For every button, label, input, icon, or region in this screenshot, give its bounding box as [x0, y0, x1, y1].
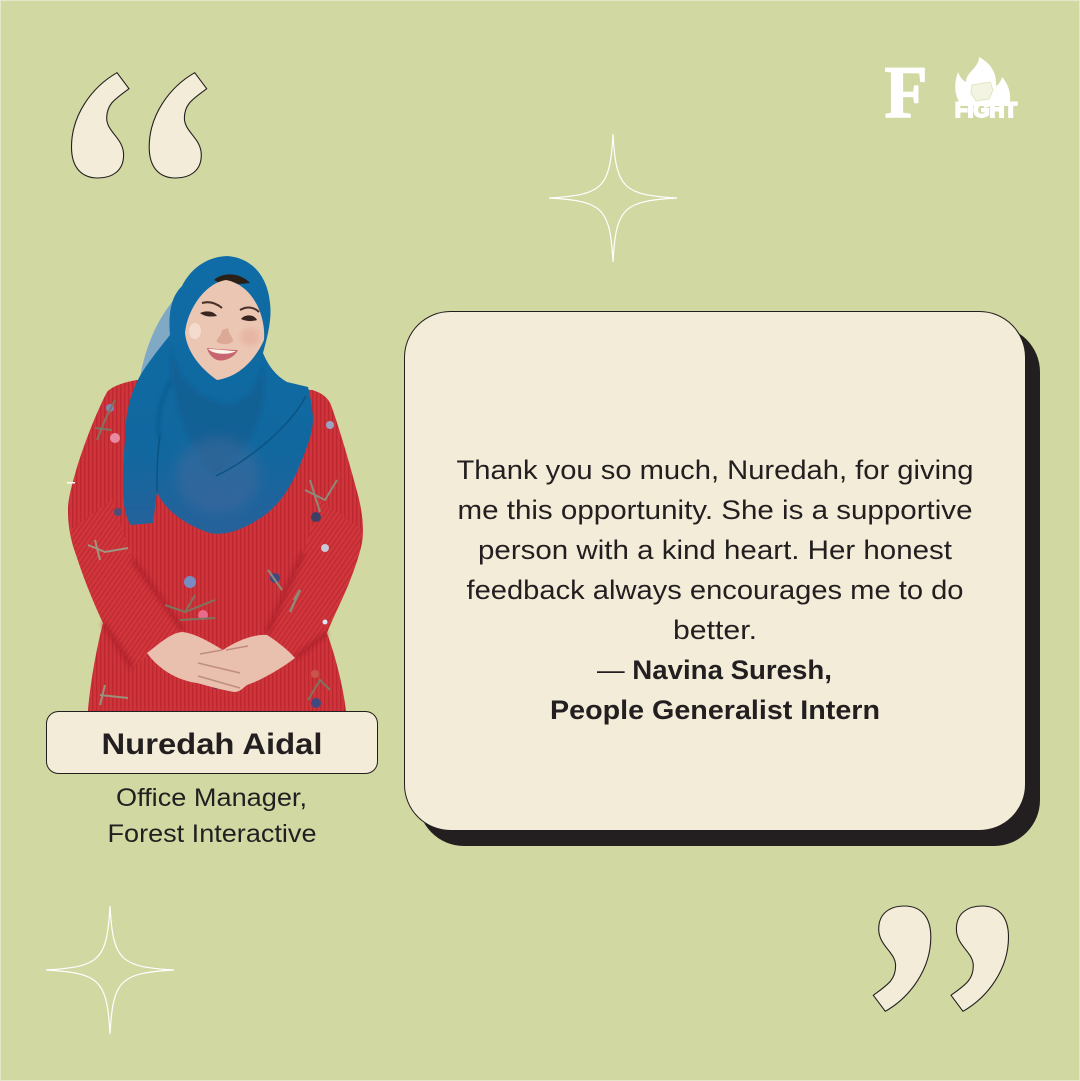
translucent scarf end [140, 295, 178, 377]
sleeve shading [103, 553, 327, 667]
logo: Forest Interactive F: F [884, 52, 928, 134]
hands [147, 632, 295, 692]
testimonial text: — Navina Suresh, [597, 655, 832, 685]
face [185, 280, 264, 380]
testimonial text: People Generalist Intern [550, 695, 880, 725]
testimonial text: better. [673, 615, 757, 645]
testimonial text [456, 455, 974, 725]
logo: Fight flame: FIGHT [955, 99, 1017, 122]
testimonial text: feedback always encourages me to do [466, 575, 964, 605]
testimonial text: me this opportunity. She is a supportive [458, 495, 972, 525]
hair line [214, 274, 250, 284]
stray sparkle fragment [67, 482, 75, 484]
icon: sparkle top centre [549, 134, 677, 262]
opening quotation mark [72, 73, 207, 178]
job title [108, 784, 316, 848]
job title: Forest Interactive [108, 820, 316, 848]
name: Nuredah Aidal [102, 728, 322, 761]
blue scarf [123, 256, 313, 534]
floral embroidery [88, 400, 337, 708]
logo: Fight flame [955, 57, 1017, 122]
icon: sparkle bottom left [46, 906, 174, 1034]
scarf folds [158, 345, 264, 476]
job title: Office Manager, [116, 784, 307, 812]
name badge [46, 712, 378, 774]
panel: testimonial card [404, 312, 1040, 846]
brows and eyes [202, 302, 259, 312]
photo: Nuredah Aidal portrait [67, 256, 363, 711]
smile [207, 348, 238, 361]
sleeves [70, 500, 183, 667]
testimonial text: Thank you so much, Nuredah, for giving [456, 455, 974, 485]
testimonial text: person with a kind heart. Her honest [478, 535, 953, 565]
red dress [68, 380, 363, 711]
closing quotation mark [873, 906, 1008, 1011]
